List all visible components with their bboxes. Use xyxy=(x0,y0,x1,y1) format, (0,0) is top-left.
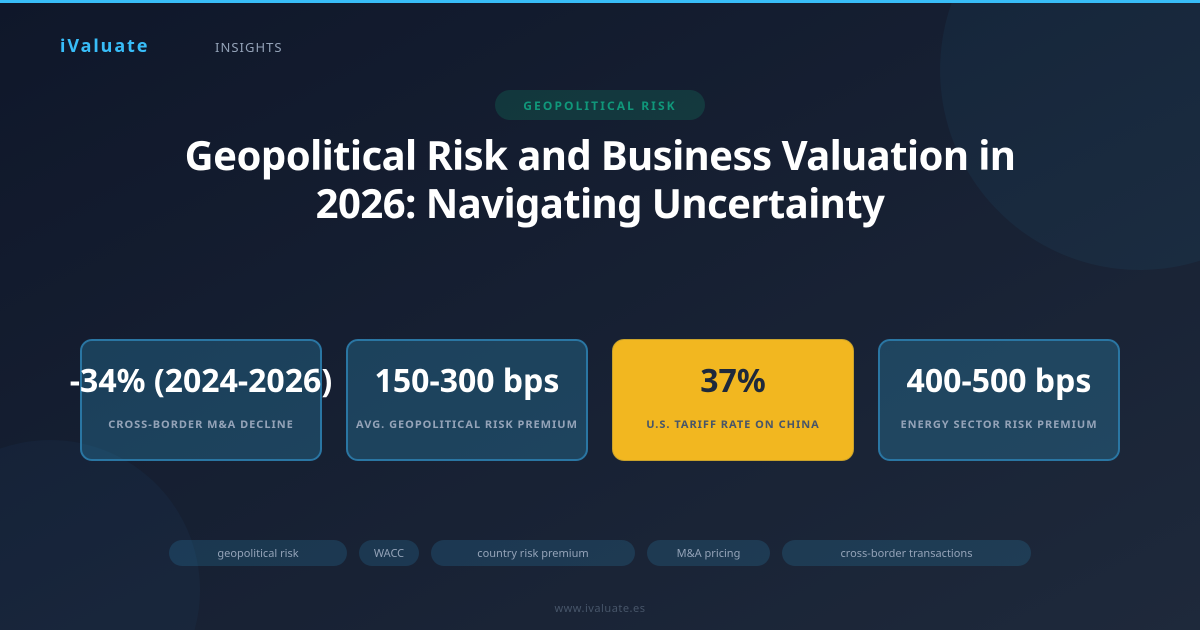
title: Geopolitical Risk and Business Valuation in xyxy=(185,127,1015,182)
stat label: AVG. GEOPOLITICAL RISK PREMIUM xyxy=(356,417,578,432)
stat value: -34% (2024-2026) xyxy=(70,359,332,402)
top accent bar xyxy=(0,0,1200,3)
stat card: tariff rate highlighted xyxy=(612,339,854,461)
tag: country risk premium xyxy=(431,540,635,566)
stat value: 37% xyxy=(700,359,766,402)
tag: cross-border transactions: cross-border transactions xyxy=(841,546,972,561)
tag: WACC: WACC xyxy=(374,546,404,561)
tag: geopolitical risk: geopolitical risk xyxy=(217,546,299,561)
tag: cross-border transactions xyxy=(782,540,1031,566)
stat label: ENERGY SECTOR RISK PREMIUM xyxy=(900,417,1098,432)
category badge: GEOPOLITICAL RISK xyxy=(523,97,677,114)
brand logo: iValuate xyxy=(60,34,150,58)
category badge xyxy=(495,90,705,120)
stat label: CROSS-BORDER M&A DECLINE xyxy=(108,417,294,432)
stat label: U.S. TARIFF RATE ON CHINA xyxy=(646,417,820,432)
stat value: 400-500 bps xyxy=(907,359,1091,402)
stat card: geopolitical risk premium xyxy=(346,339,588,461)
tag: M&A pricing: M&A pricing xyxy=(677,546,740,561)
stat value: 150-300 bps xyxy=(375,359,559,402)
title: 2026: Navigating Uncertainty xyxy=(316,175,884,230)
footer url: www.ivaluate.es xyxy=(555,601,645,616)
tag: WACC xyxy=(359,540,419,566)
tag: M&A pricing xyxy=(647,540,770,566)
stat card: energy sector premium xyxy=(878,339,1120,461)
section label: insights: INSIGHTS xyxy=(215,38,283,56)
tag: country risk premium: country risk premium xyxy=(477,546,589,561)
tag: geopolitical risk xyxy=(169,540,347,566)
title xyxy=(185,127,1015,230)
stat card: cross-border M&A decline xyxy=(80,339,322,461)
